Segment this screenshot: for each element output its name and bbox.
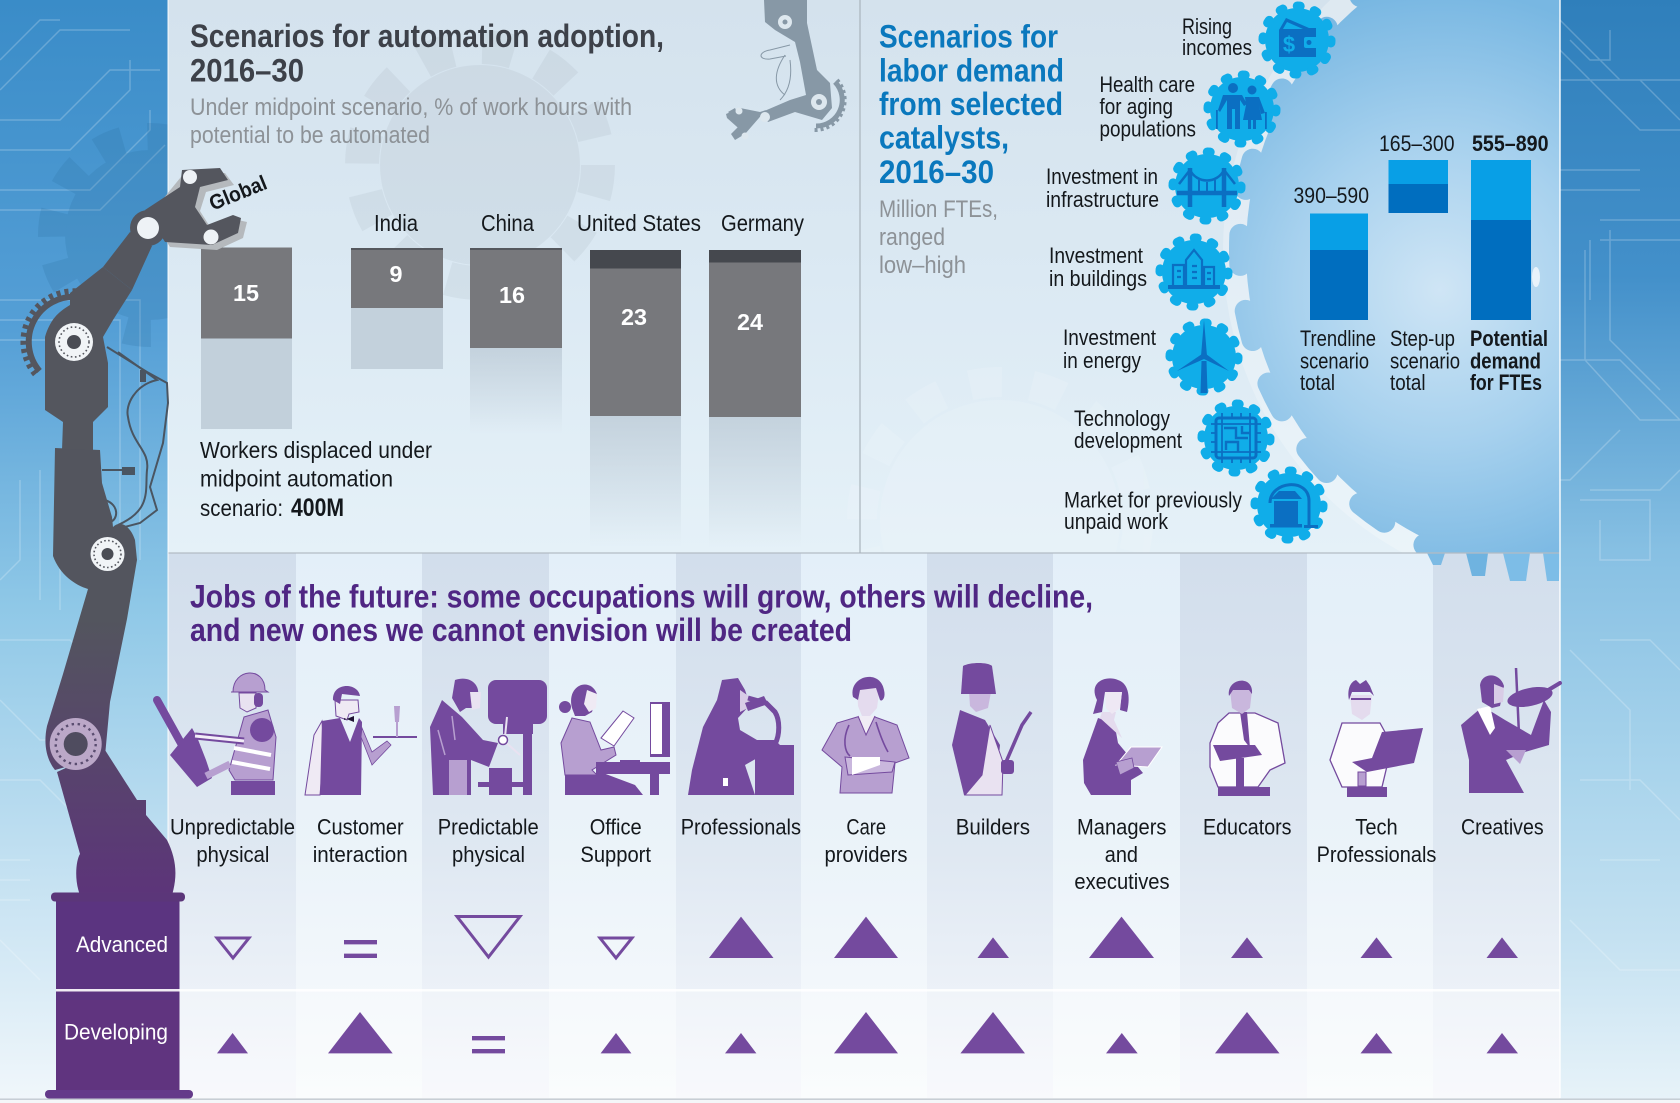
bar: China: 16 xyxy=(499,282,525,308)
arm lower segments xyxy=(45,448,137,770)
dark gear silhouette on left strip xyxy=(38,123,167,347)
catalyst: infrastructure: Investment in xyxy=(1046,164,1158,189)
occupation labels: Customer xyxy=(317,815,404,840)
catalyst: unpaid work: Market for previously xyxy=(1064,488,1242,512)
subheading: labor demand: low–high xyxy=(879,252,966,279)
occupation labels: Predictable xyxy=(438,815,539,840)
occupation labels: Managers xyxy=(1077,815,1166,840)
occupation labels: Educators xyxy=(1203,815,1292,840)
occupation labels: executives xyxy=(1074,869,1170,894)
figure: unpredictable physical xyxy=(157,673,276,795)
bar: Germany: Germany xyxy=(721,210,804,236)
subheading: labor demand: ranged xyxy=(879,224,945,251)
bar: trendline scenario: total xyxy=(1300,370,1335,395)
subheading: labor demand: Million FTEs, xyxy=(879,196,998,223)
bar: Germany: 24 xyxy=(737,309,763,335)
heading: labor demand: from selected xyxy=(879,86,1063,122)
bar: Global: 15 xyxy=(233,280,259,306)
catalyst: buildings xyxy=(1049,238,1228,306)
bar: Global xyxy=(201,248,292,429)
occupation labels: Support xyxy=(580,842,651,867)
catalyst: rising incomes: Rising xyxy=(1182,14,1232,39)
figure: customer interaction xyxy=(305,686,417,795)
bar: potential demand: Potential xyxy=(1470,326,1548,351)
catalyst: technology: development xyxy=(1074,428,1182,453)
figure: predictable physical xyxy=(430,679,547,795)
bar: step-up scenario: total xyxy=(1390,370,1426,395)
bar: potential demand: demand xyxy=(1470,348,1541,374)
catalyst: rising incomes xyxy=(1182,6,1331,74)
icon: faded small robot arm xyxy=(726,0,845,140)
bar: Germany xyxy=(709,210,804,547)
subheading: automation adoption: Under midpoint scenario, % of work hours with xyxy=(190,94,632,121)
heading: labor demand xyxy=(879,18,1064,190)
occupation labels: physical xyxy=(196,842,269,867)
pedestal: advanced and developing xyxy=(45,892,193,1098)
occupation labels: physical xyxy=(452,842,525,867)
catalyst: health care: Health care xyxy=(1100,72,1195,97)
occupation labels: Unpredictable xyxy=(170,815,295,840)
big gear: labor demand xyxy=(1223,0,1560,581)
occupation labels: providers xyxy=(824,842,908,867)
panel: occupations column bands xyxy=(168,553,1560,1098)
bar: trendline scenario: Trendline xyxy=(1300,326,1376,351)
bar: trendline scenario: 390–590 xyxy=(1294,183,1369,208)
heading: automation adoption xyxy=(190,18,664,88)
bar: potential demand: 555–890 xyxy=(1472,131,1548,156)
subheading: automation adoption: potential to be automated xyxy=(190,122,430,149)
occupation labels: Creatives xyxy=(1461,815,1544,840)
bar: India: India xyxy=(374,210,418,236)
figure: creatives xyxy=(1461,668,1560,793)
heading: jobs of the future: and new ones we cannot envision will be created xyxy=(190,612,852,648)
occupation labels: Care xyxy=(846,815,886,840)
catalyst: energy xyxy=(1063,320,1238,393)
figure: tech professionals xyxy=(1330,680,1423,797)
occupation labels: Professionals xyxy=(1317,842,1436,867)
catalyst: health care xyxy=(1100,72,1276,143)
joint 1 xyxy=(55,323,93,361)
catalyst: unpaid work xyxy=(1064,471,1323,539)
bar: trendline scenario: scenario xyxy=(1300,348,1369,374)
bar chart: automation by country xyxy=(201,210,804,547)
joint 2 xyxy=(90,537,124,571)
text: workers displaced: midpoint automation xyxy=(200,466,393,492)
bar: step-up scenario: Step-up xyxy=(1390,326,1455,351)
bar: China xyxy=(470,210,562,433)
indicators: developing economies row xyxy=(217,1012,1518,1053)
catalyst: technology: Technology xyxy=(1074,406,1170,431)
figure: builders xyxy=(952,663,1031,795)
background: left blue strip xyxy=(0,0,168,1103)
heading: labor demand: Scenarios for xyxy=(879,18,1058,54)
text: workers displaced: Workers displaced under xyxy=(200,437,432,463)
occupation labels: interaction xyxy=(313,842,408,867)
robot arm xyxy=(24,168,270,1098)
bar: step-up scenario: 165–300 xyxy=(1379,131,1454,156)
bar: potential demand: for FTEs xyxy=(1470,370,1542,395)
catalyst: technology xyxy=(1074,404,1270,472)
catalyst: rising incomes: $ xyxy=(1283,32,1295,57)
heading: labor demand: 2016–30 xyxy=(879,154,994,190)
bar: step-up scenario: scenario xyxy=(1390,348,1460,374)
heading: jobs of the future: Jobs of the future: some occupations will grow, others will decline, xyxy=(190,578,1093,614)
occupation labels: Professionals xyxy=(681,815,801,840)
circuit traces left xyxy=(0,20,165,980)
occupation labels xyxy=(170,815,1544,894)
gripper holding Global label: Global xyxy=(206,172,270,215)
occupation labels: Office xyxy=(590,815,642,840)
indicators: advanced economies row xyxy=(217,916,1518,958)
bar: India: 9 xyxy=(390,261,402,287)
bar: United States: 23 xyxy=(621,304,647,330)
arm wires xyxy=(102,347,168,530)
arm gear arc xyxy=(24,292,78,374)
arm upper segments xyxy=(45,267,132,450)
catalyst: energy: Investment xyxy=(1063,325,1156,350)
catalyst: health care: for aging xyxy=(1100,94,1173,119)
pedestal: advanced and developing: Developing xyxy=(64,1020,168,1045)
text: workers displaced: 400M xyxy=(291,494,344,522)
panel: top background xyxy=(168,0,1560,553)
figure: managers and executives xyxy=(1083,678,1162,795)
figure: care providers xyxy=(822,677,909,793)
bar: India xyxy=(351,210,443,369)
heading: labor demand: labor demand xyxy=(879,52,1064,88)
figure: professionals xyxy=(688,678,794,795)
background: right blue strip xyxy=(1560,0,1680,1103)
catalyst: buildings: in buildings xyxy=(1049,266,1147,291)
bar: United States xyxy=(577,210,701,546)
bar: United States: United States xyxy=(577,210,701,236)
faint gear lower right panel xyxy=(862,382,1138,658)
occupation labels: Tech xyxy=(1355,815,1398,840)
subheading: automation adoption xyxy=(190,94,632,149)
bar chart: FTE demand xyxy=(1294,131,1548,395)
text: workers displaced xyxy=(200,437,432,522)
figure: educators xyxy=(1210,681,1285,796)
catalyst: health care: populations xyxy=(1100,116,1196,142)
bar: step-up scenario xyxy=(1379,131,1460,395)
catalyst: rising incomes: incomes xyxy=(1182,35,1252,60)
heading: automation adoption: 2016–30 xyxy=(190,52,304,88)
bar: China: China xyxy=(481,210,534,236)
catalyst: energy: in energy xyxy=(1063,348,1141,373)
text: workers displaced: scenario: xyxy=(200,495,283,521)
faint gear behind automation chart xyxy=(362,47,598,283)
occupation labels: and xyxy=(1105,842,1138,867)
heading: automation adoption: Scenarios for automation adoption, xyxy=(190,18,664,54)
heading: labor demand: catalysts, xyxy=(879,120,1009,156)
occupation labels: Builders xyxy=(956,815,1030,840)
subheading: labor demand xyxy=(879,196,998,279)
catalyst: buildings: Investment xyxy=(1049,243,1143,268)
bar: potential demand xyxy=(1470,131,1548,395)
gripper holding Global label xyxy=(130,168,270,250)
joint 3 xyxy=(50,718,102,770)
pedestal: advanced and developing: Advanced xyxy=(76,932,168,957)
heading: jobs of the future xyxy=(190,578,1093,648)
circuit traces right xyxy=(1560,20,1680,970)
catalyst: infrastructure: infrastructure xyxy=(1046,187,1159,212)
figure: office support xyxy=(559,684,670,795)
catalyst: unpaid work: unpaid work xyxy=(1064,509,1169,534)
bar: trendline scenario xyxy=(1294,183,1376,395)
catalyst: infrastructure xyxy=(1046,152,1241,220)
